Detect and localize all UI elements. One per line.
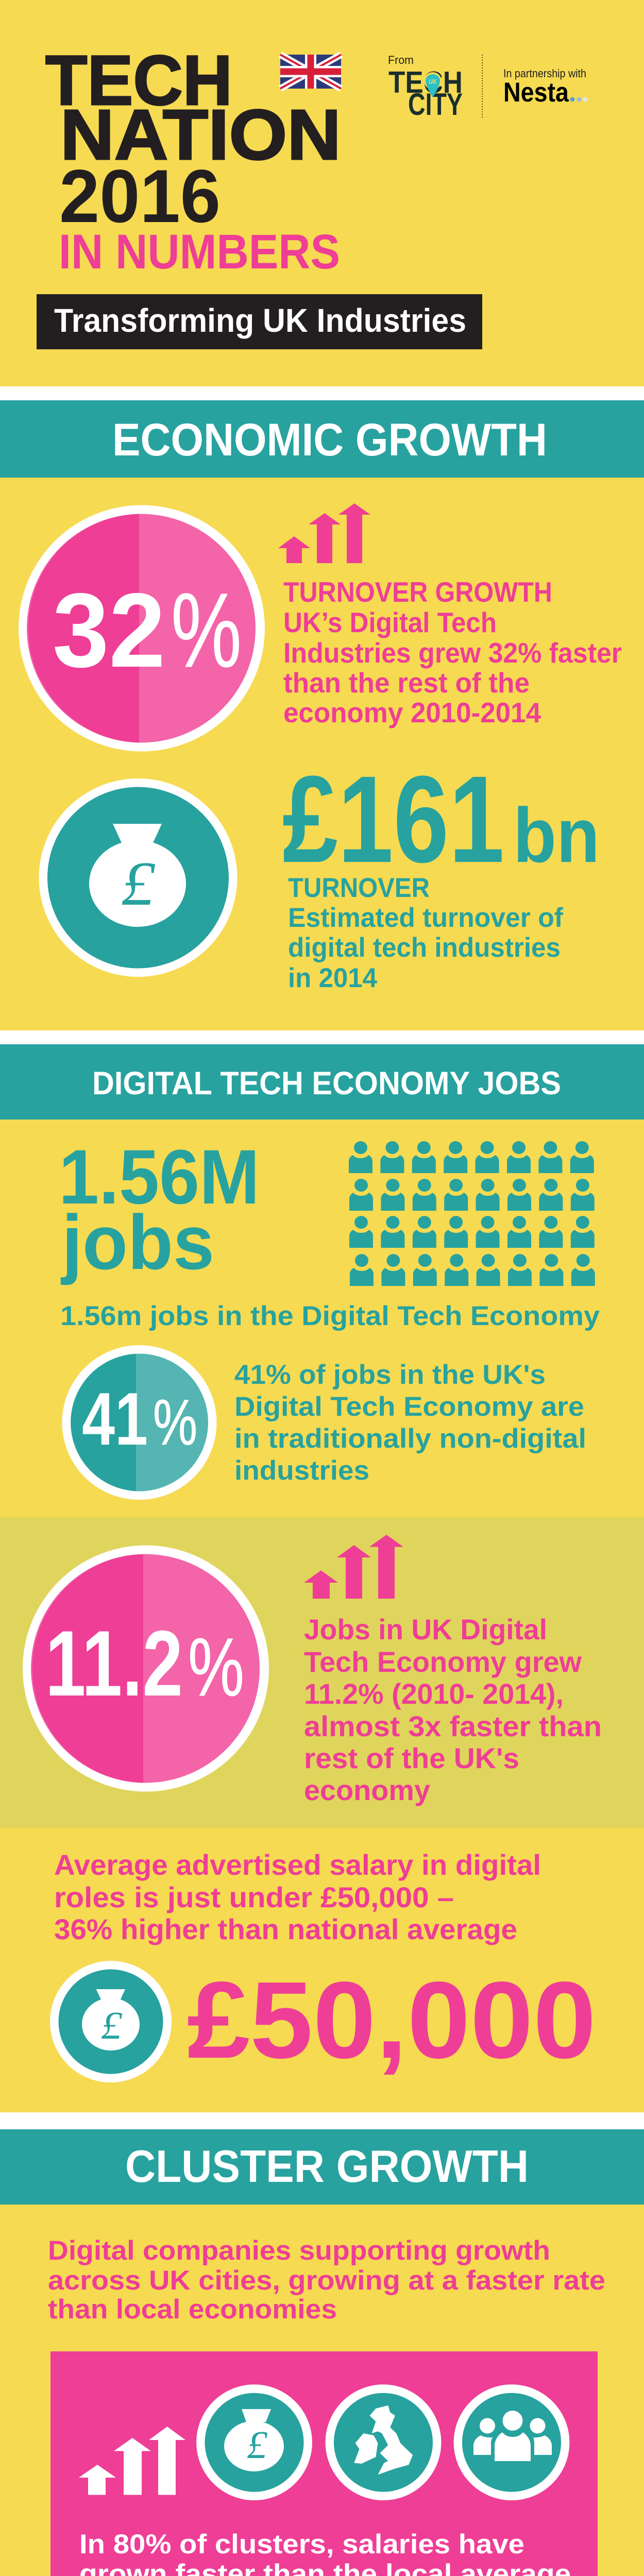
text: digital companies: across UK cities, growing at a faster rate xyxy=(48,2265,605,2296)
panel: jobs growth xyxy=(0,1517,644,1828)
title: Tech Nation 2016: TECH xyxy=(45,41,232,120)
section header: cluster growth xyxy=(0,2129,644,2205)
section header: economic growth: ECONOMIC GROWTH xyxy=(112,414,547,465)
stat: 1.56M jobs: 1.56M xyxy=(59,1133,260,1220)
icon: money bag circle: £ xyxy=(247,2424,268,2467)
icon: money bag xyxy=(39,778,237,977)
icon: money bag circle xyxy=(196,2384,312,2500)
text: 41% of jobs: in traditionally non-digital xyxy=(234,1423,586,1454)
from Tech City logo: CITY xyxy=(408,87,463,122)
icon: growth arrows pink xyxy=(278,503,370,563)
text: 41% of jobs xyxy=(234,1360,586,1486)
text: turnover growth: TURNOVER GROWTH xyxy=(283,576,552,608)
text: average salary: Average advertised salary in digital xyxy=(54,1849,541,1881)
icon: UK flag xyxy=(280,55,341,89)
icon: growth arrows white xyxy=(79,2427,185,2495)
from Tech City logo: UK xyxy=(429,77,437,86)
from Tech City logo xyxy=(388,54,463,122)
stat: 1.56M jobs: jobs xyxy=(60,1199,214,1285)
text: turnover: TURNOVER xyxy=(288,873,430,903)
text: digital companies xyxy=(48,2235,605,2325)
icon: money bag small: £ xyxy=(101,2004,123,2047)
text: 41% of jobs: 41% of jobs in the UK's xyxy=(234,1360,546,1390)
text: turnover growth: than the rest of the xyxy=(283,667,530,699)
stat: £161bn: £161 xyxy=(282,750,504,888)
text: jobs grew: Tech Economy grew xyxy=(304,1646,582,1678)
text: jobs grew xyxy=(304,1613,602,1806)
stat: 32% circle: 32 xyxy=(53,571,165,689)
from Tech City logo: TECH xyxy=(388,65,463,99)
text: jobs grew: 11.2% (2010- 2014), xyxy=(304,1677,564,1710)
text: jobs grew: almost 3x faster than xyxy=(304,1710,602,1742)
in partnership with Nesta logo: Nesta xyxy=(503,77,569,108)
text: turnover growth: economy 2010-2014 xyxy=(283,697,541,728)
stat: £50,000: £50,000 xyxy=(187,1959,596,2081)
header xyxy=(37,41,587,349)
text: jobs grew: Jobs in UK Digital xyxy=(304,1613,547,1646)
text: turnover: Estimated turnover of xyxy=(288,903,563,933)
stat: 11.2% circle xyxy=(23,1546,269,1792)
panel: clusters xyxy=(50,2351,598,2576)
stat: 32% circle: % xyxy=(171,571,242,689)
stat: 32% circle xyxy=(19,505,265,751)
text: jobs grew: rest of the UK's xyxy=(304,1742,519,1774)
stat: 11.2% circle: % xyxy=(188,1621,244,1713)
stat: £161bn: bn xyxy=(513,792,600,878)
text: in 80% of clusters: In 80% of clusters, salaries have xyxy=(79,2529,524,2560)
text: turnover growth: Industries grew 32% faster xyxy=(283,637,622,669)
section header: economic growth xyxy=(0,400,644,478)
section header: digital tech economy jobs xyxy=(0,1044,644,1120)
text: average salary: 36% higher than national average xyxy=(54,1913,517,1945)
title: Tech Nation 2016: 2016 xyxy=(59,154,221,238)
text: in 80% of clusters xyxy=(79,2529,579,2576)
icon: UK map circle xyxy=(326,2384,441,2500)
text: digital companies: than local economies xyxy=(48,2294,337,2325)
stat: 41% circle xyxy=(62,1345,216,1500)
icon: growth arrows pink xyxy=(304,1535,403,1599)
text: 41% of jobs: Digital Tech Economy are xyxy=(234,1392,584,1422)
section header: digital tech economy jobs: DIGITAL TECH ECONOMY JOBS xyxy=(92,1065,561,1101)
in partnership with Nesta logo: In partnership with xyxy=(503,67,586,80)
banner: Transforming UK Industries xyxy=(37,294,482,349)
stat: 1.56M jobs xyxy=(59,1133,260,1285)
text: average salary xyxy=(54,1849,541,1945)
stat: 41% circle: 41 xyxy=(82,1377,148,1461)
text: turnover: in 2014 xyxy=(288,963,377,993)
text: turnover: digital tech industries xyxy=(288,933,561,963)
text: digital companies: Digital companies supporting growth xyxy=(48,2235,550,2266)
text: turnover growth xyxy=(283,576,622,728)
text: jobs grew: economy xyxy=(304,1774,430,1806)
heading: in numbers: IN NUMBERS xyxy=(59,225,340,279)
title: Tech Nation 2016: NATION xyxy=(60,95,341,175)
stat: 41% circle: % xyxy=(153,1387,197,1459)
icon: grid of people xyxy=(349,1141,595,1286)
text: 1.56m jobs caption: 1.56m jobs in the Digital Tech Economy xyxy=(60,1301,600,1331)
text: turnover growth: UK’s Digital Tech xyxy=(283,606,497,638)
text: average salary: roles is just under £50,000 – xyxy=(54,1881,454,1913)
text: 41% of jobs: industries xyxy=(234,1455,369,1486)
text: turnover xyxy=(288,873,563,993)
icon: money bag small xyxy=(50,1961,172,2082)
from Tech City logo: From xyxy=(388,54,414,66)
title: Tech Nation 2016 xyxy=(45,41,341,238)
icon: people circle xyxy=(454,2384,569,2500)
stat: 11.2% circle: 11.2 xyxy=(45,1612,183,1716)
icon: money bag: £ xyxy=(121,849,156,919)
banner: Transforming UK Industries: Transforming UK Industries xyxy=(54,302,466,339)
in partnership with Nesta logo xyxy=(503,67,587,108)
section header: cluster growth: CLUSTER GROWTH xyxy=(125,2141,529,2192)
